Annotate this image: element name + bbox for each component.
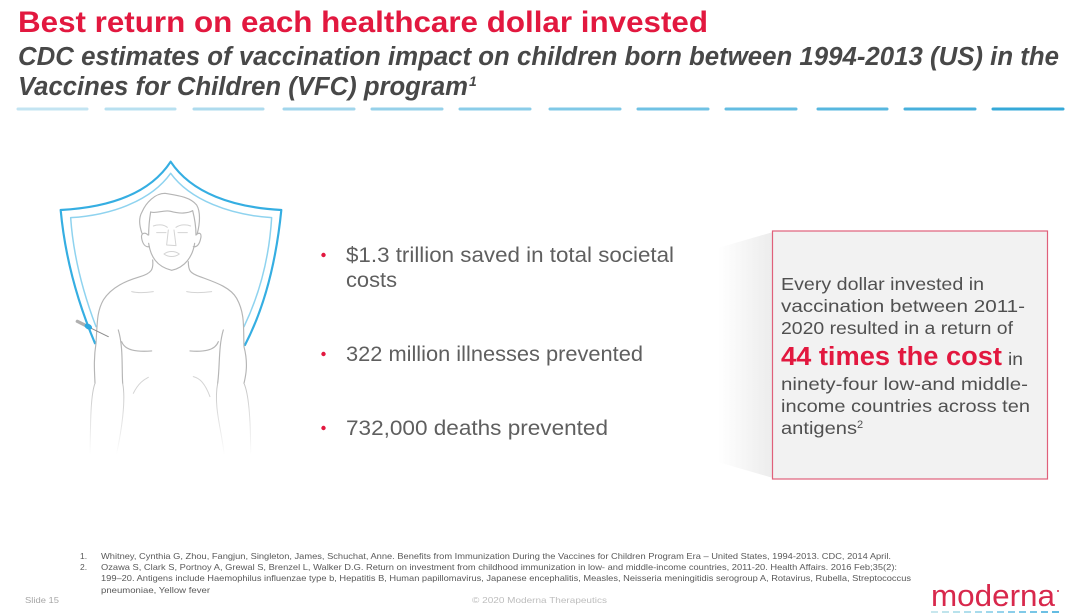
- callout text: Every dollar invested in: [781, 274, 984, 294]
- bullet: societal costs: $1.3 trillion saved in total societal: [346, 244, 674, 267]
- callout panel: [772, 231, 1048, 479]
- header dashed rule: [18, 108, 1063, 110]
- logo: moderna: moderna: [931, 578, 1056, 613]
- icon: human figure: [90, 190, 253, 457]
- callout text: 2: [857, 419, 863, 431]
- footnotes: Whitney, Cynthia G, Zhou, Fangjun, Singleton, James, Schuchat, Anne. Benefits from Immunization During the Vaccines for Children Program Era – United States, 1994-2013. CDC, 2014 April.: [101, 551, 891, 561]
- subtitle: Vaccines for Children (VFC) program: [18, 73, 468, 101]
- icon: inner shield: [71, 173, 272, 327]
- callout text: 2020 resulted in a return of: [781, 318, 1013, 338]
- subtitle: [18, 43, 1059, 101]
- icon: injection syringe: [77, 321, 108, 337]
- bullet list: [321, 244, 674, 440]
- bullet: societal costs: [321, 244, 674, 292]
- callout text: [781, 274, 1030, 438]
- bullet: societal costs: costs: [346, 269, 397, 292]
- callout text: 44 times the cost: [781, 343, 1003, 371]
- footnotes: Ozawa S, Clark S, Portnoy A, Grewal S, Brenzel L, Walker D.G. Return on investment from childhood immunization in low- and middle-income countries, 2011-20. Health Affairs. 2016 Feb;35(2):: [101, 562, 897, 572]
- callout shadow: [718, 232, 773, 478]
- illustration: person protected by shield: [61, 162, 281, 457]
- callout text: income countries across ten: [781, 396, 1030, 416]
- subtitle: CDC estimates of vaccination impact on children born between 1994-2013 (US) in the: [18, 43, 1059, 71]
- slide number: Slide 15: [25, 595, 59, 605]
- footnotes: pneumoniae, Yellow fever: [101, 585, 210, 595]
- bullet: deaths prevented: 732,000 deaths prevented: [346, 417, 608, 440]
- subtitle: 1: [469, 73, 477, 89]
- footnotes: 1.: [80, 551, 87, 561]
- bullet: illnesses prevented: 322 million illnesses prevented: [346, 343, 643, 366]
- footnotes: 199–20. Antigens include Haemophilus influenzae type b, Hepatitis B, Human papillomavirus, Japanese encephalitis, Measles, Neisseria meningitidis serogroup A, Rotavirus, Rubella, Streptococcus: [101, 573, 911, 583]
- footnotes: 2.: [80, 562, 87, 572]
- footnotes: [80, 551, 911, 595]
- copyright: © 2020 Moderna Therapeutics: [472, 595, 607, 605]
- callout text: ninety-four low-and middle-: [781, 374, 1028, 394]
- title: Best return on each healthcare dollar invested: [18, 6, 708, 39]
- callout text: antigens: [781, 418, 857, 438]
- callout text: in: [1008, 349, 1023, 369]
- icon: outer shield: [61, 162, 281, 345]
- logo dashes: [931, 611, 1059, 613]
- callout text: vaccination between 2011-: [781, 296, 1025, 316]
